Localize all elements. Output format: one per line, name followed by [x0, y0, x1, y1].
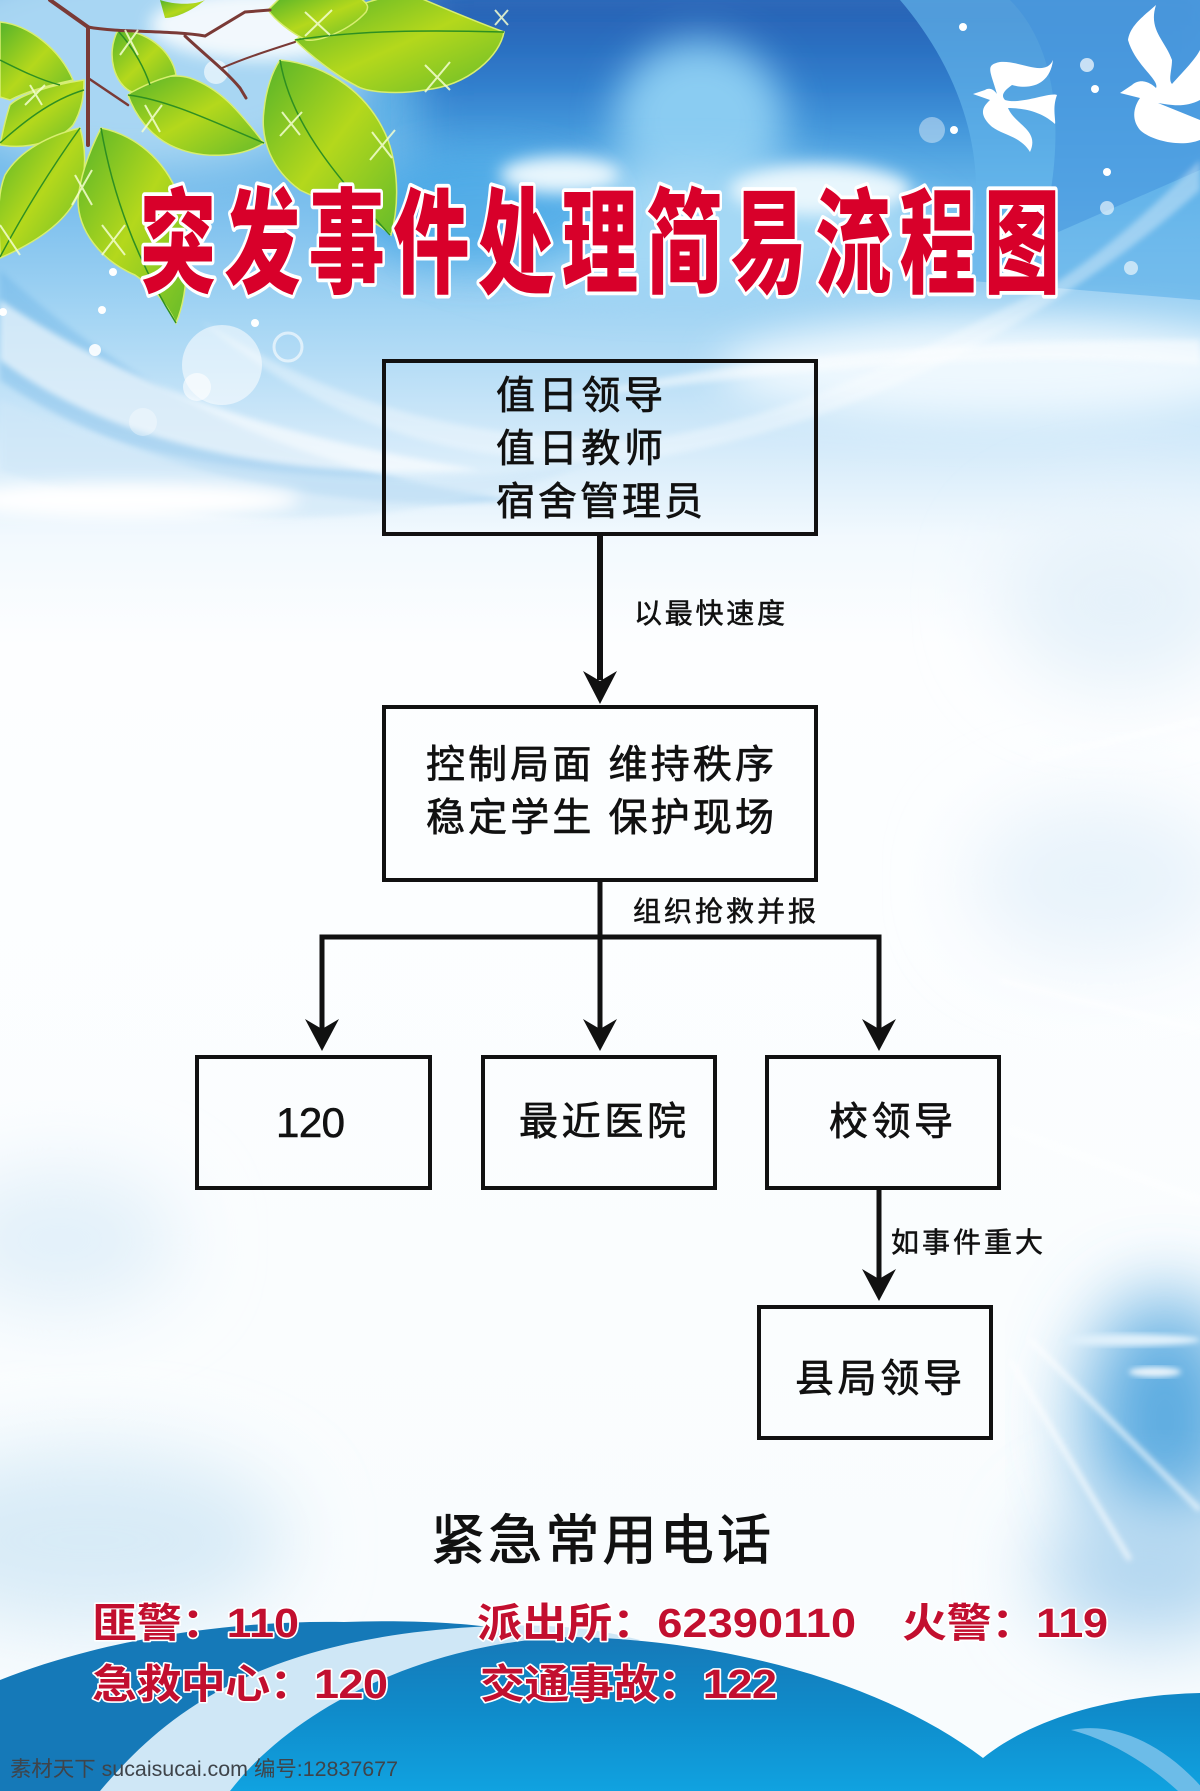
phone: traffic accident: 交通事故：122	[480, 1662, 777, 1707]
leaves and branches	[0, 0, 508, 323]
box: on-duty personnel: 值日教师	[496, 428, 663, 471]
box: school leaders: 校领导	[829, 1101, 953, 1144]
branch connector with three arrows	[305, 881, 896, 1051]
box: on-duty personnel: 宿舍管理员	[496, 481, 703, 524]
label: organize rescue and report: 组织抢救并报	[633, 896, 816, 927]
label: if the incident is major: 如事件重大	[891, 1227, 1043, 1258]
box: control the situation: 稳定学生 保护现场	[426, 797, 774, 840]
phone: ambulance: 急救中心：120	[92, 1662, 388, 1707]
label: fastest speed: 以最快速度	[634, 598, 785, 629]
box: nearest hospital: 最近医院	[519, 1101, 686, 1144]
box: 120: 120	[276, 1099, 345, 1146]
box: on-duty personnel	[384, 361, 816, 534]
box: on-duty personnel: 值日领导	[496, 375, 663, 418]
box: control the situation: 控制局面 维持秩序	[426, 744, 774, 787]
phone: fire: 火警：119	[902, 1601, 1108, 1646]
phone: police station: 派出所：62390110	[477, 1601, 856, 1646]
arrow: to county leaders	[862, 1189, 896, 1301]
heading: emergency phone numbers: 紧急常用电话	[431, 1511, 771, 1571]
box: school leaders	[767, 1057, 999, 1188]
arrow: to control box	[583, 535, 617, 704]
title: 突发事件处理简易流程图	[140, 180, 1060, 309]
emergency phone list	[92, 1601, 1108, 1707]
flowchart	[197, 361, 1043, 1438]
box: control the situation	[384, 707, 816, 880]
box: 120	[197, 1057, 430, 1188]
box: county bureau leaders: 县局领导	[795, 1358, 962, 1401]
box: nearest hospital	[483, 1057, 715, 1188]
dove: left	[973, 60, 1057, 152]
box: county bureau leaders	[759, 1307, 991, 1438]
watermark: 素材天下 sucaisucai.com 编号:12837677	[10, 1758, 398, 1781]
phone: police: 匪警：110	[92, 1601, 299, 1646]
dove: right	[1120, 5, 1200, 143]
decorative bubbles	[0, 23, 1138, 436]
